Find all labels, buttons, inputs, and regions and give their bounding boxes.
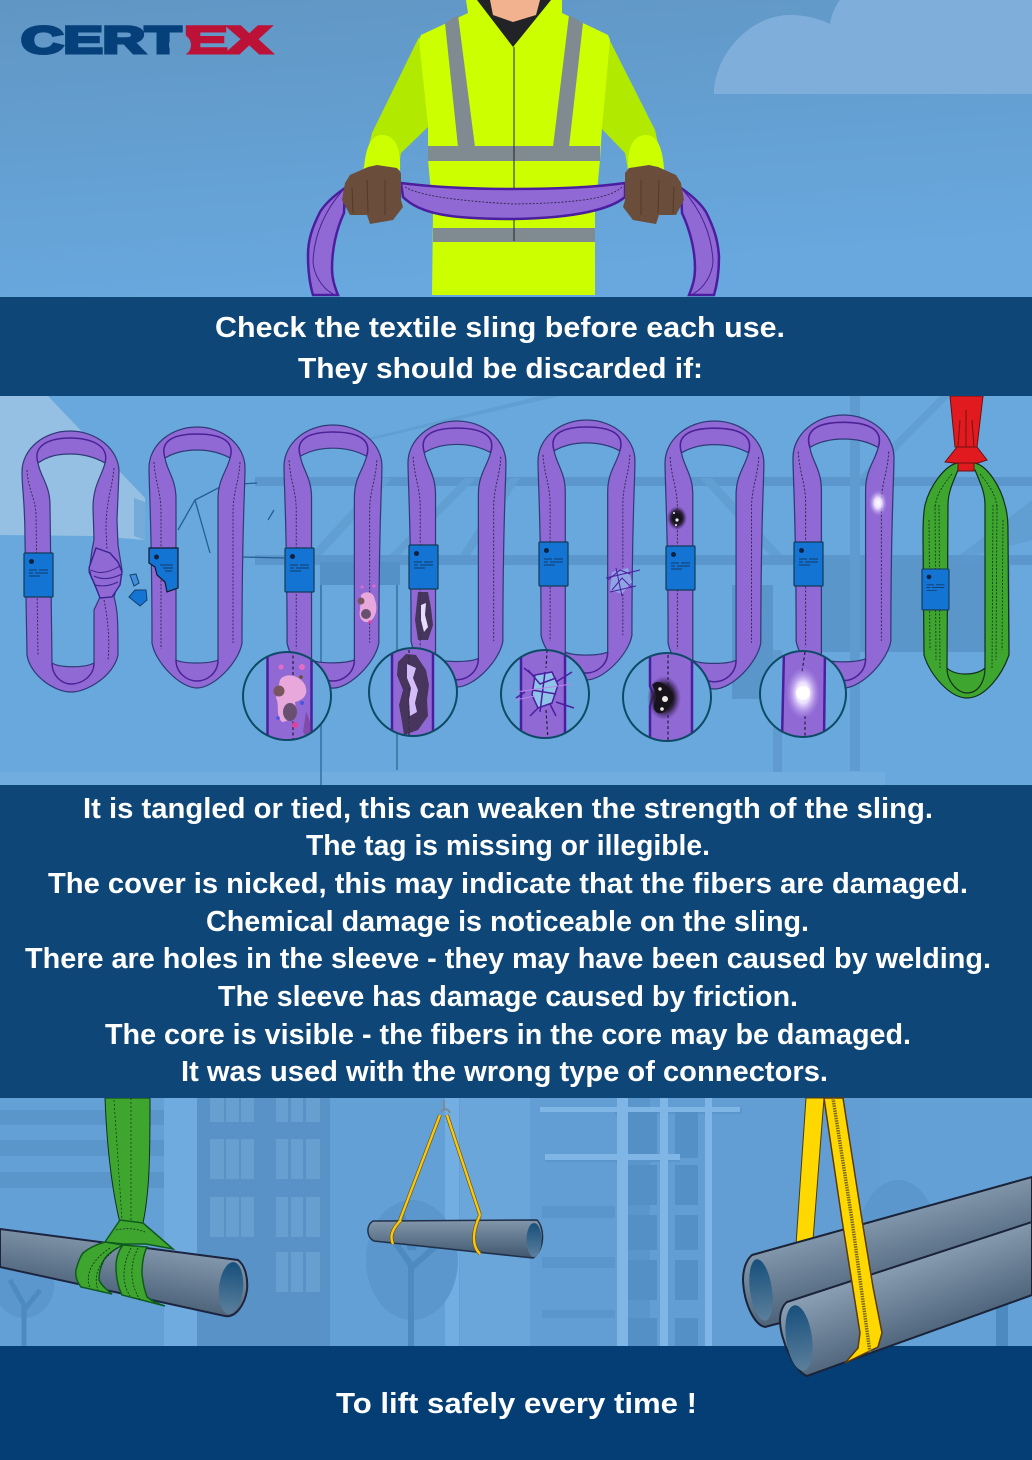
icon: right hand [623,165,684,224]
icon: yellow back strap [796,1098,824,1245]
panel: sky with worker [0,0,1032,297]
icon: background tree centre [366,1200,458,1346]
reasons text: The tag is missing or illegible. [306,830,710,862]
icon: left hand [342,165,403,224]
magnifier 3: cracked cover [501,645,589,740]
icon: background tree left [0,1252,54,1346]
reasons text: There are holes in the sleeve - they may have been caused by welding. [25,943,991,975]
magnifier 5: friction glow [760,650,846,740]
logo: CERT [21,20,181,62]
sling 6: welding holes [665,421,764,689]
panel: bottom scene background [0,1097,1032,1348]
icon: yellow two-leg sling [391,1115,480,1254]
heading: Check the textile sling before each use. [215,312,785,344]
panel: sling illustrations background [0,396,1032,786]
magnifier 2: torn fibers [369,645,457,740]
logo [21,20,272,62]
band: heading [0,297,1032,396]
magnifier 4: burn holes [623,650,711,745]
logo: EX [184,20,272,62]
magnifier 1: chemical damage [243,650,331,745]
heading: They should be discarded if: [298,353,703,385]
icon: lower pipe [780,1222,1032,1376]
worker [363,0,664,295]
icon: green sling hitch [76,1098,173,1306]
sling 2: torn tag [129,427,245,688]
closing text: To lift safely every time ! [336,1388,697,1420]
reasons text: It is tangled or tied, this can weaken the strength of the sling. [83,793,933,825]
icon: yellow front strap [824,1098,882,1363]
sling 5: cut with cracks [538,420,640,680]
reasons text [25,793,991,1088]
sling 4: torn cover [408,421,506,687]
band: discard reasons [0,785,1032,1098]
sling 7: friction spot [793,415,894,688]
band: closing [0,1346,1032,1460]
right pipes with yellow sling [743,1098,1032,1376]
middle pipe with yellow sling [368,1100,543,1258]
icon: torn tag fragments [129,574,147,606]
sling 1: tangled [22,431,122,692]
reasons text: The core is visible - the fibers in the core may be damaged. [105,1019,911,1051]
reasons text: The cover is nicked, this may indicate that the fibers are damaged. [48,868,968,900]
reasons text: The sleeve has damage caused by friction. [218,981,798,1013]
sling 8: green with wrong connector [922,396,1009,698]
icon: red strap and knot [945,396,987,471]
icon: background tree right [858,1180,1008,1346]
tag [24,553,53,597]
sling 3: cover nicked (chemical spot) [284,425,382,688]
icon: knot [89,548,122,598]
cloud [714,0,1032,94]
left pipe with green sling [0,1098,247,1316]
icon: green sling loop [922,463,1009,698]
reasons text: Chemical damage is noticeable on the sling. [206,906,809,938]
icon: torn tag [149,548,178,592]
icon: purple sling held by worker [308,183,719,295]
heading [215,312,785,385]
icon: lifting hook [441,1100,450,1113]
icon: upper pipe [743,1177,1032,1327]
reasons text: It was used with the wrong type of connectors. [181,1056,828,1088]
